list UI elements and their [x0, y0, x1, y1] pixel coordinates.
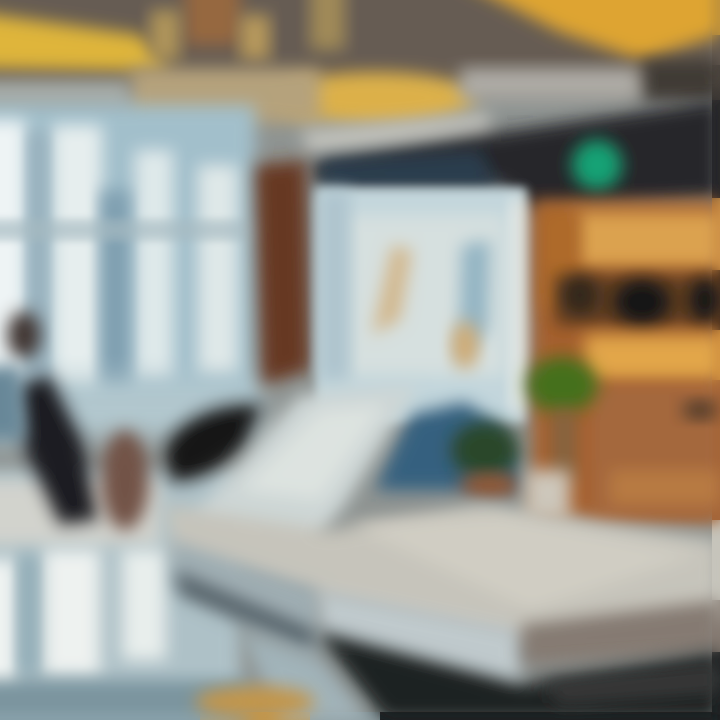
wooden wall: [532, 200, 720, 520]
dark beam and green sign: [310, 100, 720, 212]
base layer holding colours at the frame edges: [200, 0, 720, 720]
pale chart panel: [316, 188, 528, 423]
blue object and small plant: [375, 402, 570, 520]
brown column: [255, 160, 310, 385]
windows: [0, 105, 260, 440]
icon: green exit light: [572, 140, 622, 190]
white table with inclined sheet: [165, 385, 720, 690]
bright ceiling band: [0, 68, 640, 155]
floor reflection: [0, 470, 250, 720]
dark base at bottom right: [195, 630, 720, 720]
plant: [526, 357, 598, 480]
ceiling with golden lights: [0, 0, 720, 124]
dark wall openings: [614, 279, 670, 325]
seated figure and chair: [0, 311, 262, 530]
